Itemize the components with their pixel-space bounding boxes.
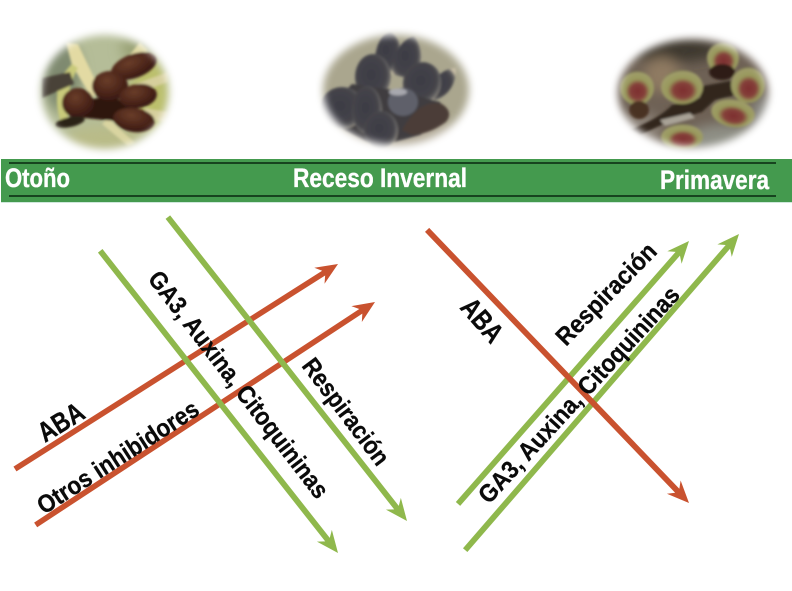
arrow: ABA falling — [420, 223, 696, 510]
arrow: GA3, Auxina, Citoquininas — [93, 245, 345, 559]
right chart: winter to spring trends — [420, 223, 746, 556]
label: ABA: ABA — [454, 292, 510, 349]
label: Respiración: Respiración — [296, 353, 395, 471]
label: Otros inhibidores: Otros inhibidores — [32, 395, 204, 520]
arrow: ABA falling — [10, 256, 343, 477]
left chart: autumn to winter trends — [10, 211, 414, 559]
photo: autumn buds — [36, 30, 174, 154]
arrow: respiración rising — [451, 235, 696, 510]
label: GA3, Auxina, Citoquininas: GA3, Auxina, Citoquininas — [473, 281, 686, 509]
label: GA3, Auxina, Citoquininas: GA3, Auxina, Citoquininas — [142, 266, 334, 504]
label: Otoño: Otoño — [5, 163, 70, 193]
arrow: respiración — [160, 211, 414, 527]
photo: spring buds — [610, 30, 780, 156]
label: Receso Invernal: Receso Invernal — [293, 163, 467, 193]
arrow: otros inhibidores — [30, 294, 380, 533]
photo: winter dormancy buds — [318, 30, 474, 150]
season band — [1, 159, 792, 203]
label: ABA: ABA — [32, 396, 90, 448]
label: Respiración: Respiración — [550, 237, 663, 351]
label: Primavera: Primavera — [660, 165, 770, 195]
arrow: GA3, Auxina, Citoquininas rising — [458, 228, 746, 556]
